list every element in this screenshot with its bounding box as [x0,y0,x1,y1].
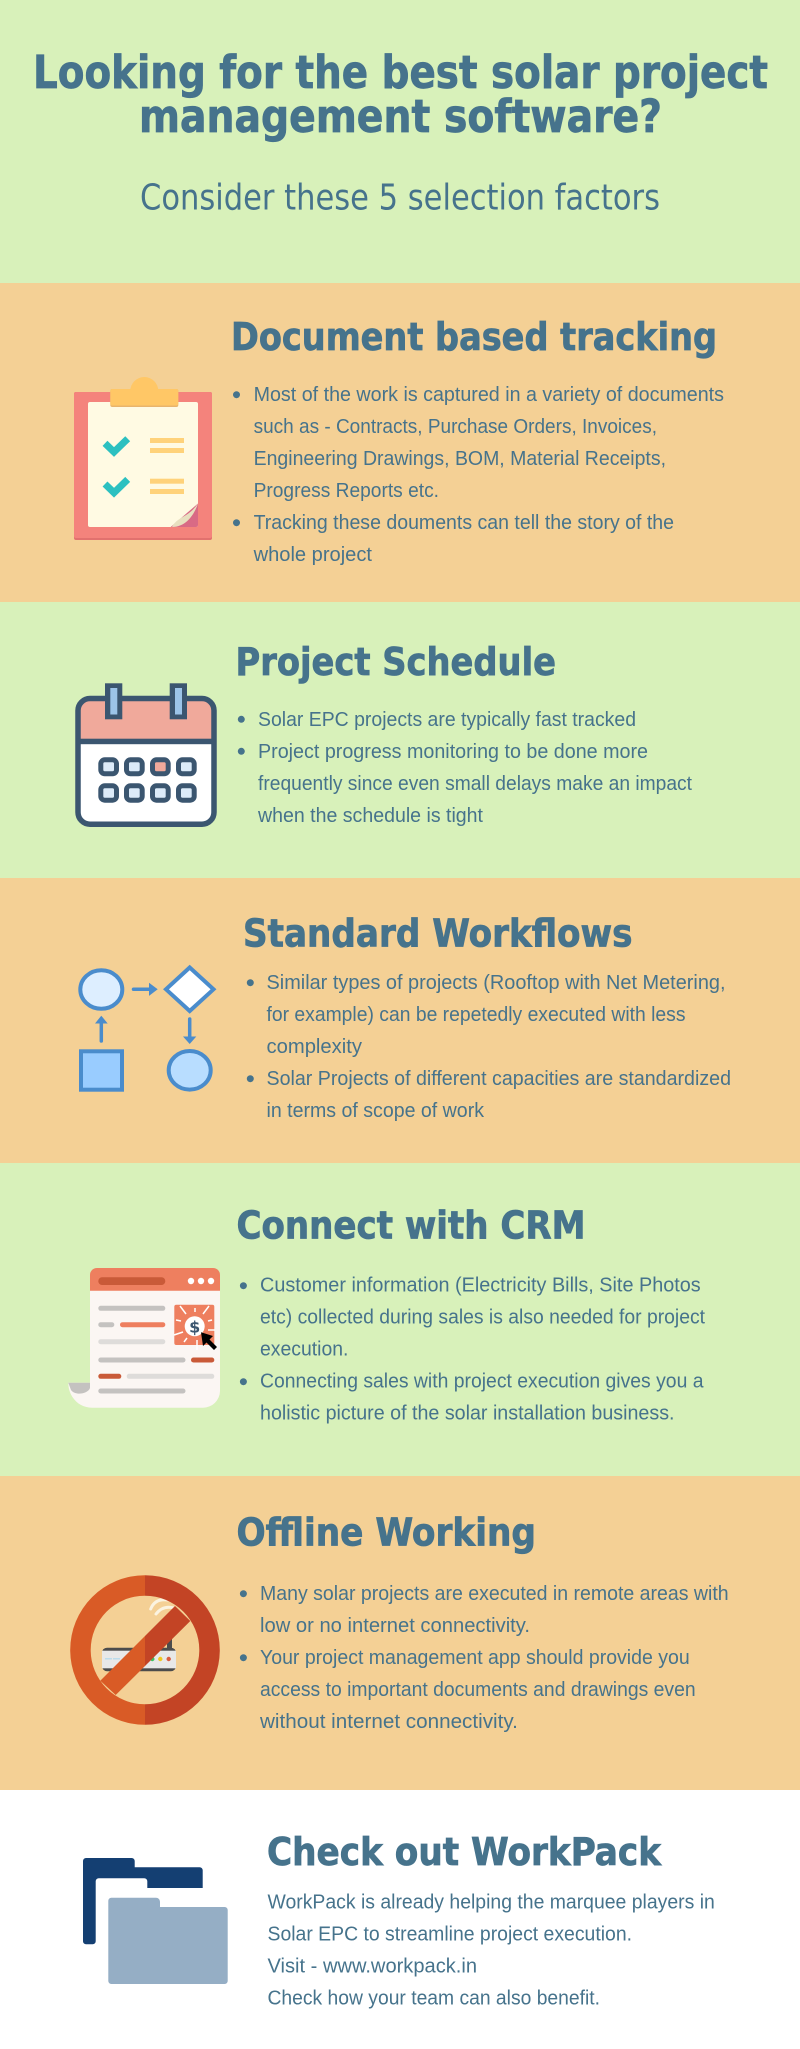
text block: workpack description: Visit - www.workpack.in [268,1955,477,1977]
bullet list: standard workflows: Solar Projects of different capacities are standardized [266,1068,731,1090]
bullet list: project schedule: when the schedule is tight [257,805,483,827]
heading: offline working: Offline Working [236,1510,536,1554]
bullet list: document tracking: Progress Reports etc. [254,480,439,502]
bullet list: standard workflows: in terms of scope of work [266,1100,485,1122]
bullet list: document tracking: whole project [253,544,372,566]
bullet list: standard workflows [247,972,731,1122]
heading: document based tracking: Document based tracking [231,315,717,359]
bullet list: offline working [240,1583,729,1733]
bullet list: project schedule [238,709,692,827]
panel: document based tracking [0,283,800,602]
panel: check out workpack [0,1790,800,2049]
panel: connect with crm [0,1163,800,1476]
icon: no wifi router [70,1575,220,1725]
icon: workflow diagram [80,968,214,1090]
bullet list: connect with crm: Connecting sales with project execution gives you a [260,1371,704,1393]
bullet list: connect with crm: execution. [260,1339,348,1361]
heading: check out workpack: Check out WorkPack [267,1830,662,1874]
bullet list: standard workflows: complexity [266,1036,362,1058]
icon: clipboard [74,377,212,540]
bullet list: offline working: without internet connectivity. [259,1711,518,1733]
text block: workpack description: Check how your team can also benefit. [268,1987,600,2009]
text block: workpack description [268,1891,715,2009]
icon: folders [83,1858,228,1984]
panel: header [0,0,800,283]
bullet list: offline working: low or no internet connectivity. [260,1615,530,1637]
text block: workpack description: WorkPack is already helping the marquee players in [268,1891,715,1913]
bullet list: offline working: Your project management app should provide you [260,1647,690,1669]
bullet list: offline working: access to important documents and drawings even [260,1679,696,1701]
bullet list: connect with crm: etc) collected during sales is also needed for project [260,1307,705,1329]
heading: standard workflows: Standard Workflows [243,912,632,956]
heading: connect with crm: Connect with CRM [236,1204,586,1248]
icon: invoice document [68,1268,220,1408]
panel: project schedule [0,602,800,878]
panel: offline working [0,1476,800,1790]
heading: project schedule: Project Schedule [236,640,556,684]
bullet list: standard workflows: for example) can be repetedly executed with less [266,1004,686,1026]
bullet list: document tracking: Tracking these douments can tell the story of the [254,512,674,534]
title [33,46,768,143]
title: Looking for the best solar project [33,46,768,99]
text block: workpack description: Solar EPC to streamline project execution. [268,1923,632,1945]
bullet list: connect with crm: Customer information (Electricity Bills, Site Photos [260,1275,701,1297]
bullet list: project schedule: Project progress monitoring to be done more [258,741,648,763]
bullet list: document tracking [233,384,724,566]
bullet list: document tracking: Most of the work is captured in a variety of documents [254,384,724,406]
bullet list: document tracking: Engineering Drawings, BOM, Material Receipts, [254,448,666,470]
title: management software? [139,90,662,143]
panel: standard workflows [0,878,800,1163]
bullet list: project schedule: frequently since even small delays make an impact [258,773,692,795]
icon text: dollar sign: $ [189,1318,200,1336]
bullet list: connect with crm [240,1275,705,1425]
bullet list: connect with crm: holistic picture of the solar installation business. [260,1403,674,1425]
bullet list: project schedule: Solar EPC projects are typically fast tracked [258,709,636,731]
bullet list: offline working: Many solar projects are executed in remote areas with [260,1583,729,1605]
subtitle: Consider these 5 selection factors [140,178,660,218]
bullet list: standard workflows: Similar types of projects (Rooftop with Net Metering, [266,972,726,994]
icon: calendar [76,683,216,824]
bullet list: document tracking: such as - Contracts, Purchase Orders, Invoices, [254,416,657,438]
